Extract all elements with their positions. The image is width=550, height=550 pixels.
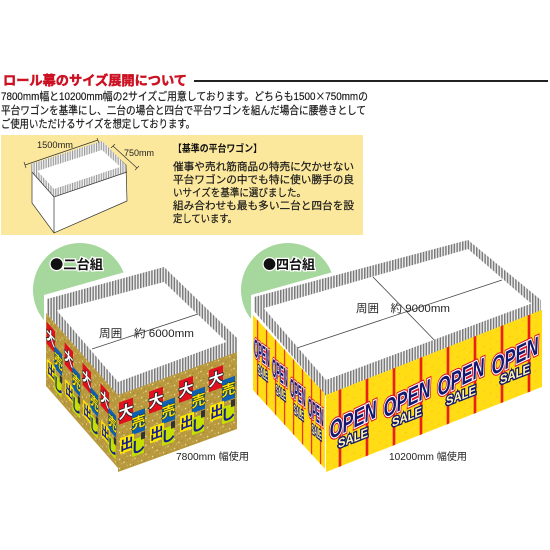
right face with banners: し (190, 414, 206, 437)
panel text (173, 142, 355, 225)
title: ロール幕のサイズ展開について (3, 72, 187, 88)
top divider lines (297, 277, 502, 348)
left face with banners: OPEN (307, 393, 324, 434)
back fences (47, 267, 237, 352)
white backing (251, 240, 545, 390)
left face with banners: し (107, 434, 117, 462)
back fences (254, 240, 541, 312)
left face with banners: 売 (54, 348, 63, 374)
right face with banners: 売 (162, 401, 175, 423)
right face with banners: OPEN (382, 375, 432, 424)
right face with banners: OPEN (436, 353, 486, 402)
left face with banners: し (89, 413, 99, 441)
left face with banners: 出 (65, 379, 74, 405)
panel text: いサイズを基準に選びました。 (173, 186, 306, 199)
right face with banners (118, 352, 237, 472)
right face with banners: 売 (222, 379, 235, 401)
right face with banners: OPEN (436, 353, 486, 402)
perimeter label: 周囲 約 6000mm (99, 326, 194, 340)
right face with banners: SALE (392, 404, 422, 430)
red stripes (340, 315, 529, 466)
intro text (1, 88, 368, 130)
perimeter label: 周囲 約 9000mm (356, 301, 450, 315)
left face with banners: OPEN (271, 353, 288, 394)
panel text: 【基準の平台ワゴン】 (173, 142, 262, 155)
left face with banners: 出 (83, 400, 92, 425)
left face with banners: 大 (100, 386, 109, 414)
top divider line (92, 314, 198, 349)
right face with banners: SALE (446, 382, 476, 409)
left face with banners: 売 (90, 389, 99, 415)
near fences (254, 297, 541, 396)
left face with banners: OPEN (271, 353, 288, 394)
green circle badge (33, 243, 127, 337)
left face with banners (253, 315, 325, 469)
left face with banners: OPEN (307, 393, 324, 434)
panel: standard wagon (1, 135, 363, 235)
left face with banners: 大 (46, 324, 55, 352)
left face with banners: SALE (258, 363, 268, 385)
left face with banners: 出 (47, 359, 56, 384)
intro text: 7800mm幅と10200mm幅の2サイズご用意しております。どちらも1500×750mmの (1, 88, 368, 104)
left face with banners: SALE (294, 403, 304, 425)
right face with banners (326, 310, 542, 472)
diagram: wagon box: 750mm (124, 148, 154, 159)
section: four wagons (241, 240, 545, 472)
right face with banners: 出 (150, 423, 164, 444)
left face with banners: OPEN (253, 334, 270, 375)
left face with banners: OPEN (289, 373, 306, 414)
left face with banners: 大 (82, 365, 91, 393)
right face with banners: 売 (132, 412, 145, 434)
panel text: 定しています。 (173, 213, 237, 225)
diagram: wagon box: 1500mm (37, 140, 73, 151)
right face with banners: 出 (120, 434, 134, 455)
width label: 10200mm 幅使用 (389, 450, 467, 463)
panel text: 平台ワゴンの中でも特に使い勝手の良 (173, 173, 355, 186)
right face with banners: OPEN (382, 375, 432, 424)
panel text: 組み合わせも最も多い二台と四台を設 (173, 199, 355, 212)
right face with banners: SALE (500, 361, 530, 387)
red stripes (258, 320, 321, 464)
heading: four wagons: ●四台組 (263, 254, 315, 273)
width label: 7800mm 幅使用 (176, 450, 249, 463)
right face with banners: 大 (148, 390, 164, 412)
right face with banners: 大 (118, 400, 134, 423)
right face with banners: 大 (208, 368, 224, 391)
right face with banners: し (160, 425, 176, 448)
box top surface (47, 282, 237, 395)
near fences (47, 299, 237, 396)
intro text: ご使用いただけるサイズを想定しております。 (1, 116, 195, 130)
right face with banners: し (130, 436, 146, 458)
intro text: 平台ワゴンを基準にし、二台の場合と四台で平台ワゴンを組んだ場合に腰巻きとして (1, 103, 366, 117)
left face with banners: 出 (101, 420, 110, 446)
right face with banners: OPEN (328, 396, 378, 445)
left face with banners: SALE (312, 422, 322, 445)
left face with banners: し (53, 372, 63, 400)
heading: two wagons: ●二台組 (50, 254, 103, 273)
left face with banners: し (71, 392, 81, 421)
right face with banners: 出 (210, 401, 224, 423)
right face with banners: し (220, 403, 236, 426)
left face with banners: SALE (276, 383, 286, 405)
left face with banners: OPEN (289, 373, 306, 414)
right face with banners: SALE (338, 425, 368, 451)
right face with banners: OPEN (328, 396, 378, 445)
section: two wagons (33, 243, 249, 472)
left face with banners: 売 (108, 410, 117, 436)
left face with banners (46, 313, 118, 468)
left face with banners: 売 (72, 369, 81, 395)
right face with banners: 売 (192, 390, 205, 412)
green circle badge (241, 243, 335, 337)
left face with banners: OPEN (253, 334, 270, 375)
box top surface (254, 248, 542, 395)
right face with banners: 大 (178, 379, 194, 402)
right face with banners: 出 (180, 412, 194, 433)
left face with banners: 大 (64, 345, 73, 373)
diagram: wagon box (24, 138, 154, 233)
panel text: 催事や売れ筋商品の特売に欠かせない (173, 160, 354, 173)
white backing (44, 272, 240, 400)
